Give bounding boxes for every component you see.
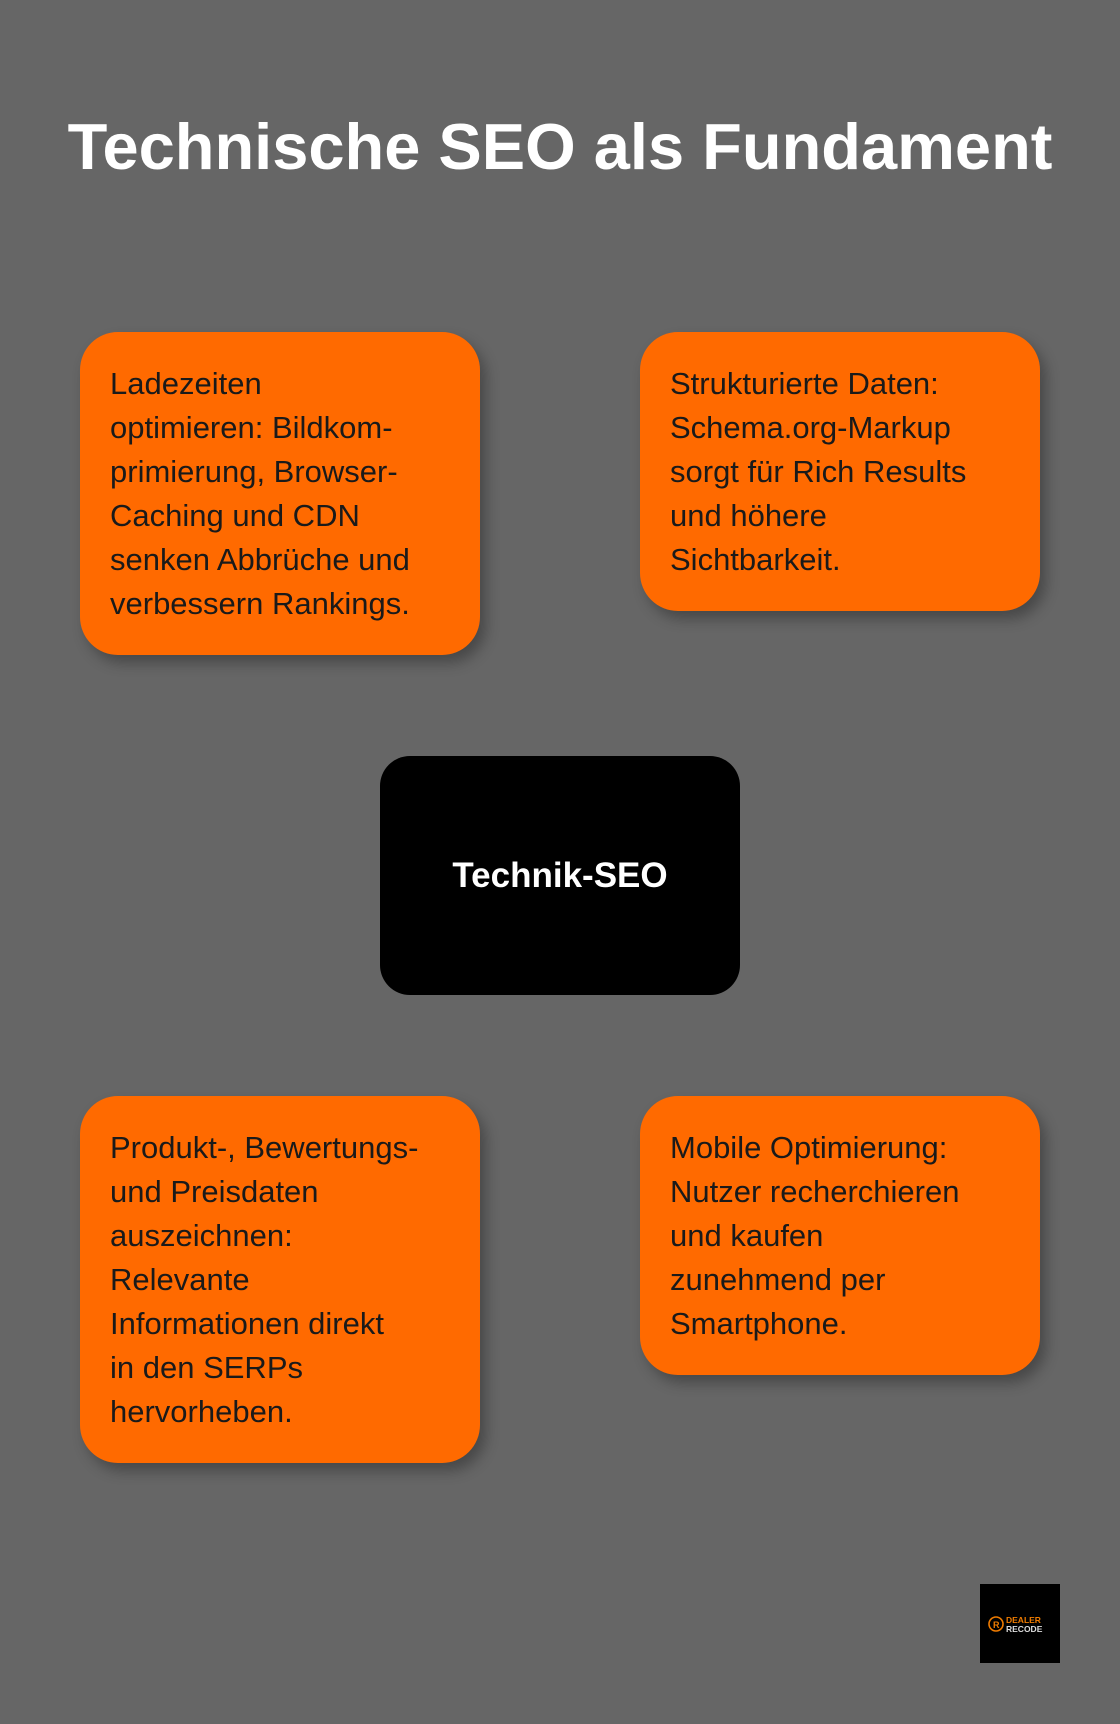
panel: Produktdaten: Produkt-, Bewertungs- <box>110 1130 418 1165</box>
panel: Produktdaten: in den SERPs <box>110 1350 303 1385</box>
panel: Produktdaten: auszeichnen: <box>110 1218 293 1253</box>
panel: Ladezeiten: Caching und CDN <box>110 498 360 533</box>
panel: Produktdaten: Relevante <box>110 1262 250 1297</box>
panel: Strukturierte Daten: sorgt für Rich Results <box>670 454 966 489</box>
panel: Mobile: und kaufen <box>670 1218 823 1253</box>
center node <box>380 756 740 995</box>
panel: Ladezeiten: optimieren: Bildkom- <box>110 410 393 445</box>
logo: RECODE <box>1006 1624 1043 1634</box>
center node: Technik-SEO <box>452 856 668 894</box>
panel: Strukturierte Daten: Strukturierte Daten: <box>670 366 939 401</box>
logo: R <box>993 1620 1000 1630</box>
panel: Strukturierte Daten <box>640 332 1040 611</box>
panel: Produktdaten: und Preisdaten <box>110 1174 319 1209</box>
panel: Mobile <box>640 1096 1040 1375</box>
panel: Ladezeiten <box>80 332 480 655</box>
panel: Mobile: Smartphone. <box>670 1306 848 1341</box>
panel: Strukturierte Daten: und höhere <box>670 498 827 533</box>
panel: Ladezeiten: verbessern Rankings. <box>110 586 410 621</box>
panel: Strukturierte Daten: Sichtbarkeit. <box>670 542 841 577</box>
panel: Mobile: zunehmend per <box>670 1262 885 1297</box>
panel: Mobile: Nutzer recherchieren <box>670 1174 959 1209</box>
logo: DEALER <box>1006 1615 1041 1625</box>
panel: Produktdaten <box>80 1096 480 1463</box>
panel: Ladezeiten: Ladezeiten <box>110 366 262 401</box>
panel: Produktdaten: Informationen direkt <box>110 1306 384 1341</box>
panel: Ladezeiten: senken Abbrüche und <box>110 542 410 577</box>
panel: Ladezeiten: primierung, Browser- <box>110 454 398 489</box>
logo <box>980 1584 1060 1663</box>
title: Technische SEO als Fundament <box>68 110 1052 183</box>
panel: Produktdaten: hervorheben. <box>110 1394 293 1429</box>
panel: Strukturierte Daten: Schema.org-Markup <box>670 410 951 445</box>
panel: Mobile: Mobile Optimierung: <box>670 1130 947 1165</box>
